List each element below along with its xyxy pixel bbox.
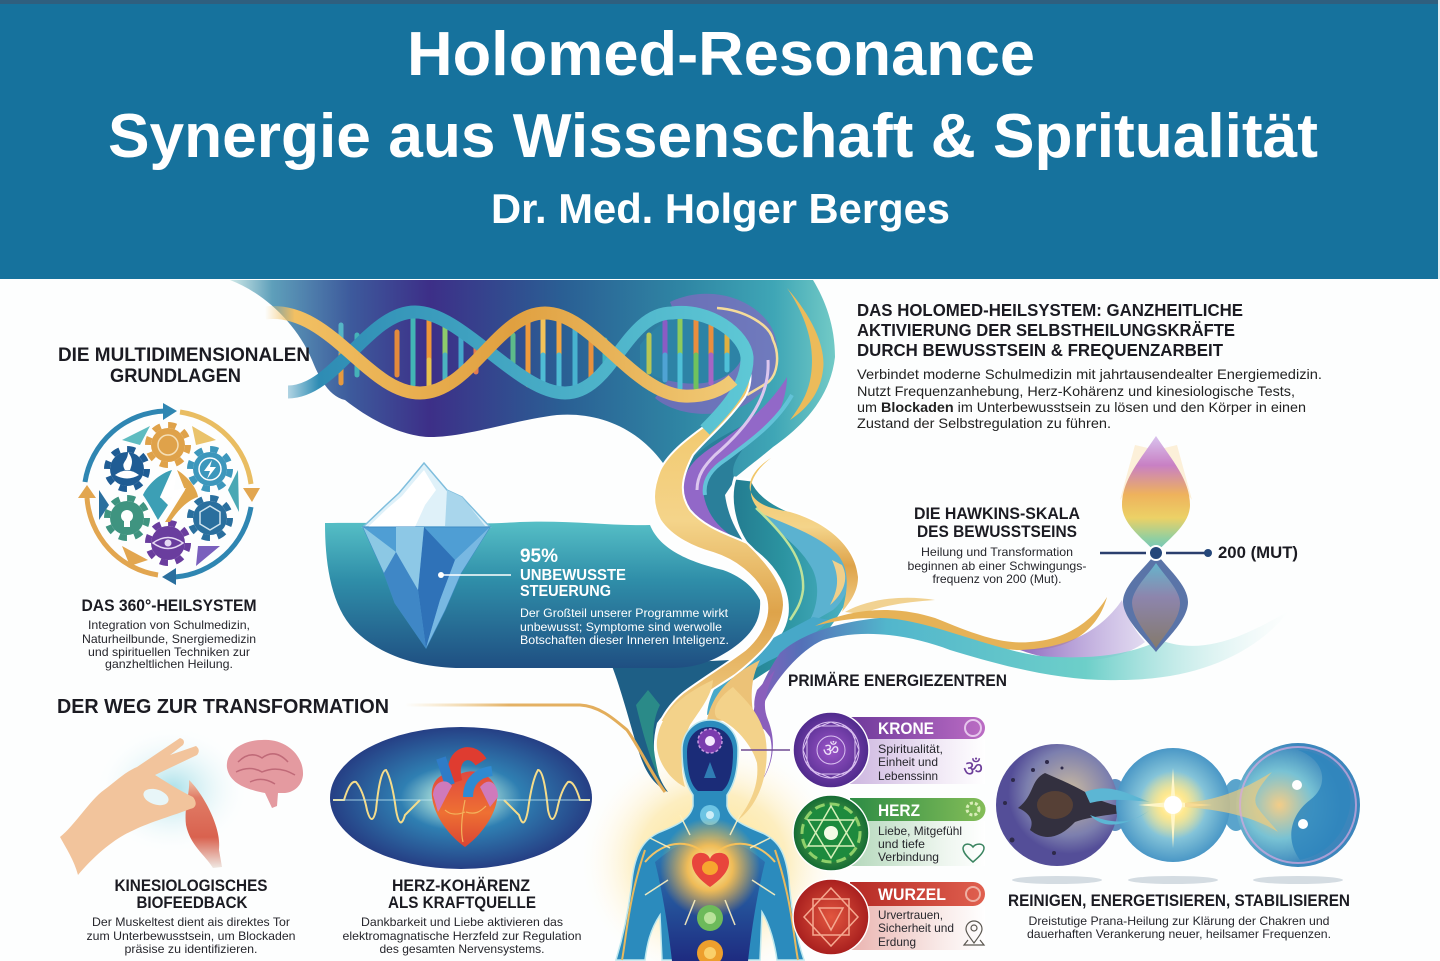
text: holomed description: um Blockaden im Unterbewusstsein zu lösen und den Körper in einen: [857, 399, 1306, 415]
iceberg text: [520, 546, 729, 647]
chakra: throat: [700, 805, 720, 825]
text: cleanse energise stabilise: Dreistutige Prana-Heilung zur Klärung der Chakren und: [1028, 914, 1330, 928]
gold connector line: [405, 705, 665, 792]
text: Hawkins scale: frequenz von 200 (Mut).: [932, 572, 1062, 586]
illustration: three healing spheres: [996, 743, 1360, 884]
funnel below water panel: [612, 660, 730, 792]
flow: gold flames round the head: [657, 660, 767, 820]
heading: holomed healing system: AKTIVIERUNG DER SELBSTHEILUNGSKRÄFTE: [857, 320, 1235, 340]
text: Hawkins scale: DES BEWUSSTSEINS: [917, 522, 1077, 541]
heading: multidimensional foundations: GRUNDLAGEN: [110, 365, 241, 387]
title line 2: Synergie aus Wissenschaft & Spritualität: [108, 102, 1318, 171]
heading: multidimensional foundations: [58, 344, 310, 387]
heading: holomed healing system: DAS HOLOMED-HEILSYSTEM: GANZHEITLICHE: [857, 300, 1243, 320]
DNA helix: [265, 312, 747, 430]
chakra card: Krone: [793, 712, 985, 788]
body silhouette: [616, 720, 804, 960]
chakra card: Krone: ॐ: [823, 740, 839, 760]
text: holomed description: Nutzt Frequenzanhebung, Herz-Kohärenz und kinesiologische Tests,: [857, 383, 1295, 399]
illustration: muscle test hand: [60, 725, 250, 875]
chakra card: Herz: [793, 795, 986, 871]
panel: iceberg water: [325, 463, 760, 792]
chakra: crown on head: [698, 729, 722, 753]
chakra card: Krone: Spiritualität,: [878, 742, 943, 756]
chakra: heart with rays: [645, 815, 775, 925]
text: kinesiological biofeedback: zum Unterbewusstsein, um Blockaden: [86, 929, 296, 943]
iceberg text: unbewusst; Symptome sind werwolle: [520, 620, 722, 634]
iceberg text: STEUERUNG: [520, 583, 611, 600]
text: holomed description: Verbindet moderne Schulmedizin mit jahrtausendealter Energiemedizin.: [857, 366, 1322, 382]
text: heart coherence: ALS KRAFTQUELLE: [388, 894, 536, 912]
chakra card: Krone: KRONE: [878, 720, 934, 738]
chakra: solar green: [697, 905, 723, 931]
illustration: heart coherence ellipse: [330, 727, 592, 869]
connector: head to crown: [741, 749, 790, 751]
chakra card: Herz: und tiefe: [878, 837, 925, 851]
text: kinesiological biofeedback: [86, 877, 296, 956]
text: 360 healing system: Naturheilbunde, Snergiemedizin: [82, 632, 256, 646]
sphere: stabilising: [1185, 743, 1360, 867]
gear: lower right navy: [190, 498, 230, 538]
text: 360 healing system: DAS 360°-HEILSYSTEM: [82, 596, 256, 615]
chart: Hawkins scale hourglass: [1100, 436, 1212, 652]
flow: coloured strands below DNA: [680, 360, 792, 548]
body glow: [577, 712, 847, 961]
text: 360 healing system: Integration von Schulmedizin,: [88, 618, 250, 632]
flow: gold tail to Hawkins scale: [815, 597, 1107, 650]
gear: bottom purple: [148, 523, 188, 563]
sphere: cleansing: [996, 744, 1140, 866]
text: holomed description: Zustand der Selbstregulation zu führen.: [857, 415, 1111, 431]
rungs: [341, 312, 727, 392]
chakra card: Krone: Lebenssinn: [878, 769, 938, 783]
text: cleanse energise stabilise: dauerhaften Verankerung neuer, heilsamer Frequenzen.: [1027, 927, 1331, 941]
face: [687, 727, 733, 791]
text: heart coherence: HERZ-KOHÄRENZ: [392, 877, 530, 895]
text: heart coherence: elektromagnatische Herzfeld zur Regulation: [342, 929, 582, 943]
chakra: orange: [697, 940, 723, 961]
iceberg text: Der Großteil unserer Programme wirkt: [520, 606, 729, 620]
chakra card: Krone: Einheit und: [878, 755, 938, 769]
chakra card: Wurzel: Sicherheit und: [878, 921, 954, 935]
flow: teal and purple tail: [753, 600, 1290, 787]
text: 360 healing system: und spirituellen Techniken zur: [88, 645, 250, 659]
heading: primary energy centres: PRIMÄRE ENERGIEZENTREN: [788, 672, 1007, 690]
flow: DNA background ribbon: [230, 280, 835, 482]
label: 200 MUT: 200 (MUT): [1218, 543, 1298, 562]
chakra card: Herz: Verbindung: [878, 850, 939, 864]
gold strand: [265, 312, 733, 396]
text: kinesiological biofeedback: Der Muskeltest dient ais direktes Tor: [92, 915, 290, 929]
icon: 360 degree gear wheel: [78, 403, 260, 585]
gear: lower left green: [107, 498, 147, 538]
title line 1: Holomed-Resonance: [407, 20, 1035, 89]
gear: top gold: [148, 425, 188, 465]
text: 360 healing system: [82, 596, 256, 671]
sphere: energising: [1085, 748, 1230, 862]
torso: [655, 839, 765, 961]
text: kinesiological biofeedback: KINESIOLOGISCHES: [114, 877, 268, 895]
flow: second band with teal and gold: [707, 458, 858, 715]
text: holomed description: [857, 366, 1322, 431]
chakra card: Herz: HERZ: [878, 802, 920, 820]
text: Hawkins scale: DIE HAWKINS-SKALA: [914, 504, 1080, 523]
chakra card: Krone: ॐ: [963, 756, 983, 781]
text: Hawkins scale: Heilung und Transformation: [921, 545, 1073, 559]
text: heart coherence: des gesamten Nervensystems.: [380, 942, 544, 956]
flow: purple glow inside ribbon: [640, 288, 823, 420]
chakra card: Herz: Liebe, Mitgefühl: [878, 824, 962, 838]
chakra card: Wurzel: [793, 879, 985, 955]
text: heart coherence: [342, 877, 582, 956]
iceberg text: Botschaften dieser Inneren Inteligenz.: [520, 633, 729, 647]
figure: body with chakras: [616, 720, 804, 961]
gear: upper left dark blue: [107, 449, 147, 489]
heading: holomed healing system: [857, 300, 1243, 360]
teal strand: [288, 312, 747, 430]
iceberg text: UNBEWUSSTE: [520, 567, 626, 584]
text: cleanse energise stabilise: [1008, 891, 1350, 941]
gear: right blue: [190, 449, 230, 489]
chakra card: Wurzel: Erdung: [878, 935, 916, 949]
flow: main gold ribbon: [654, 357, 784, 722]
text: 360 healing system: ganzheltlichen Heilung.: [105, 657, 233, 671]
text: kinesiological biofeedback: BIOFEEDBACK: [136, 894, 248, 912]
illustration: brain: [227, 740, 303, 808]
heading: path to transformation: DER WEG ZUR TRANSFORMATION: [57, 696, 389, 718]
text: Hawkins scale: beginnen ab einer Schwingungs-: [908, 559, 1086, 573]
iceberg text: 95%: [520, 546, 558, 567]
subtitle author: Dr. Med. Holger Berges: [491, 185, 950, 232]
text: cleanse energise stabilise: REINIGEN, ENERGETISIEREN, STABILISIEREN: [1008, 891, 1350, 910]
heading: multidimensional foundations: DIE MULTIDIMENSIONALEN: [58, 344, 310, 366]
chakra card: Wurzel: WURZEL: [878, 886, 946, 904]
heading: holomed healing system: DURCH BEWUSSTSEIN & FREQUENZARBEIT: [857, 340, 1223, 360]
text: kinesiological biofeedback: präsise zu identifizieren.: [124, 942, 258, 956]
iceberg: [363, 463, 490, 648]
chakra card: Wurzel: Urvertrauen,: [878, 908, 943, 922]
centre lightning: [143, 470, 198, 522]
text: heart coherence: Dankbarkeit und Liebe aktivieren das: [361, 915, 563, 929]
text: Hawkins scale: [908, 504, 1086, 586]
callout line: [438, 572, 511, 578]
title banner: [0, 0, 1440, 279]
